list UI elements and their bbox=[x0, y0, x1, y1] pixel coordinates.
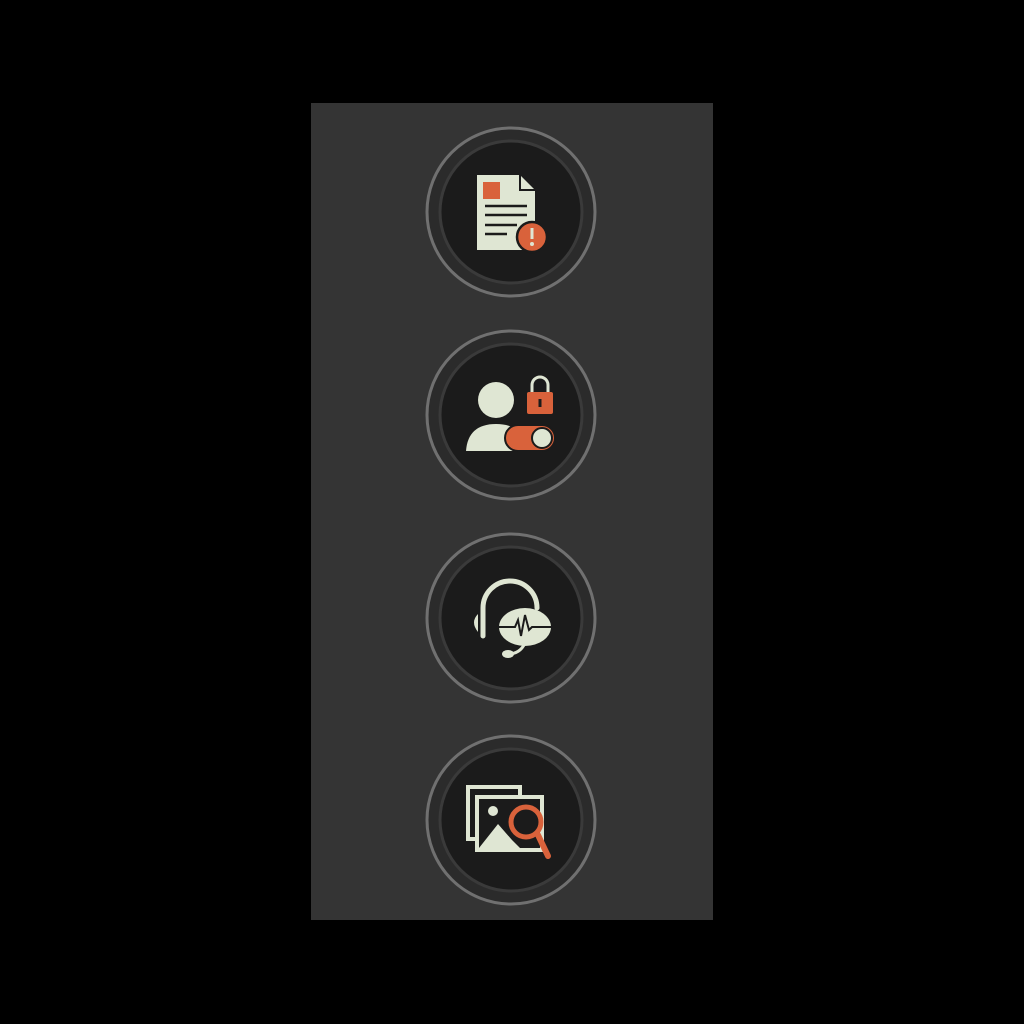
icon: document with alert bbox=[427, 128, 595, 296]
icon: headset with heartbeat bbox=[427, 534, 595, 702]
icon: user with lock and toggle bbox=[427, 331, 595, 499]
icon: images with magnifier bbox=[427, 736, 595, 904]
